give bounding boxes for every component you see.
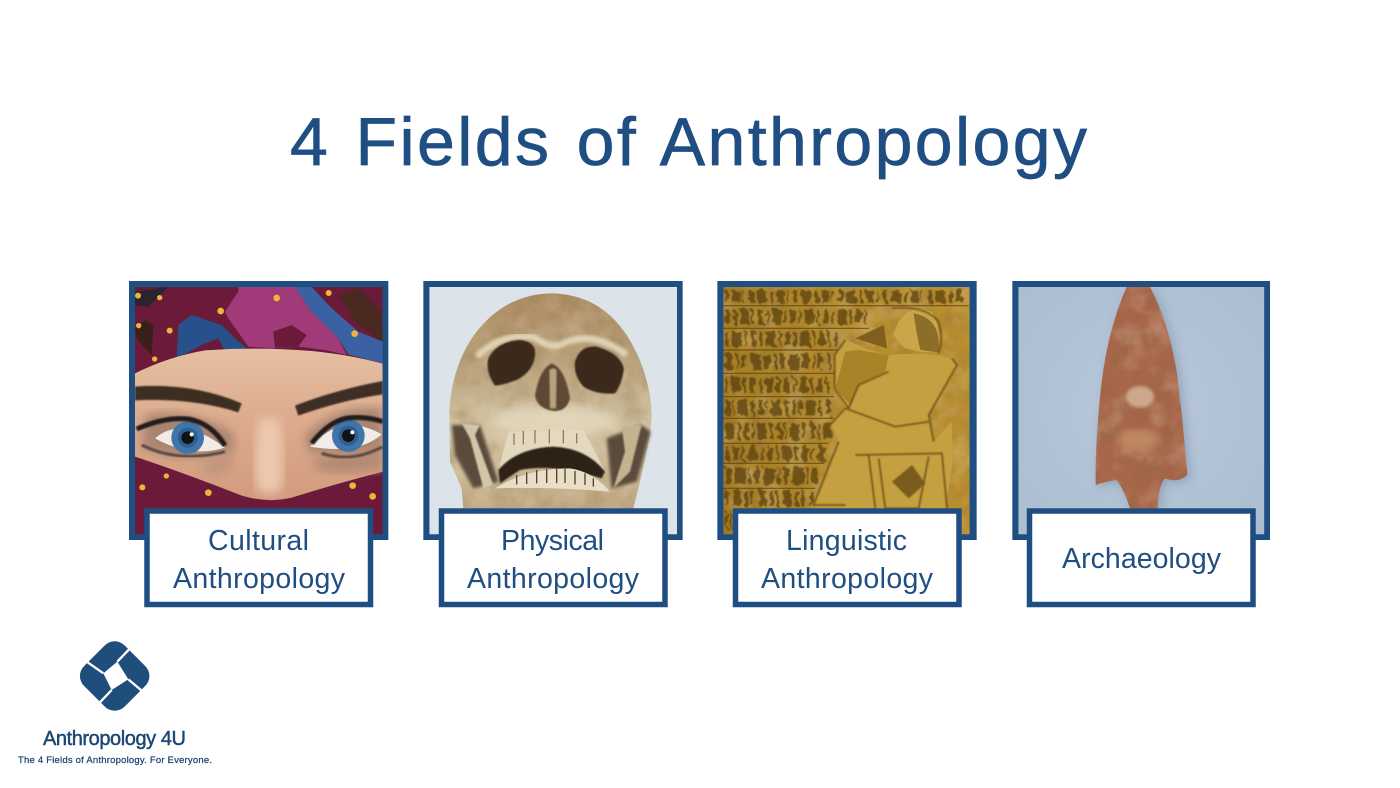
panel: linguistic anthropology	[717, 281, 977, 604]
brand name: Anthropology 4U	[43, 728, 186, 750]
label: linguistic anthropology: Linguistic	[786, 525, 907, 557]
logo: anthropology 4u	[18, 635, 212, 766]
label: physical anthropology: Physical	[501, 525, 604, 557]
panel: archaeology	[1012, 281, 1270, 604]
panel: physical anthropology	[423, 281, 683, 604]
photo: egyptian hieroglyph relief	[717, 281, 977, 540]
label: archaeology: Archaeology	[1062, 543, 1222, 575]
label: cultural anthropology: Cultural	[208, 525, 309, 557]
label: linguistic anthropology: Anthropology	[761, 563, 934, 595]
label: archaeology	[1030, 511, 1253, 604]
label: linguistic anthropology	[736, 511, 959, 604]
label: physical anthropology: Anthropology	[467, 563, 640, 595]
label: physical anthropology	[442, 511, 665, 604]
tagline: The 4 Fields of Anthropology. For Everyone.	[18, 755, 212, 766]
photo: human skull	[423, 281, 683, 540]
photo: stone arrowhead	[1012, 281, 1270, 540]
label: cultural anthropology: Anthropology	[173, 563, 346, 595]
photo: woman's eyes with headscarf	[129, 281, 388, 540]
icon: rounded diamond knot	[74, 635, 155, 717]
panel: cultural anthropology	[129, 281, 388, 604]
title: 4 Fields of Anthropology	[290, 104, 1087, 180]
label: cultural anthropology	[147, 511, 370, 604]
